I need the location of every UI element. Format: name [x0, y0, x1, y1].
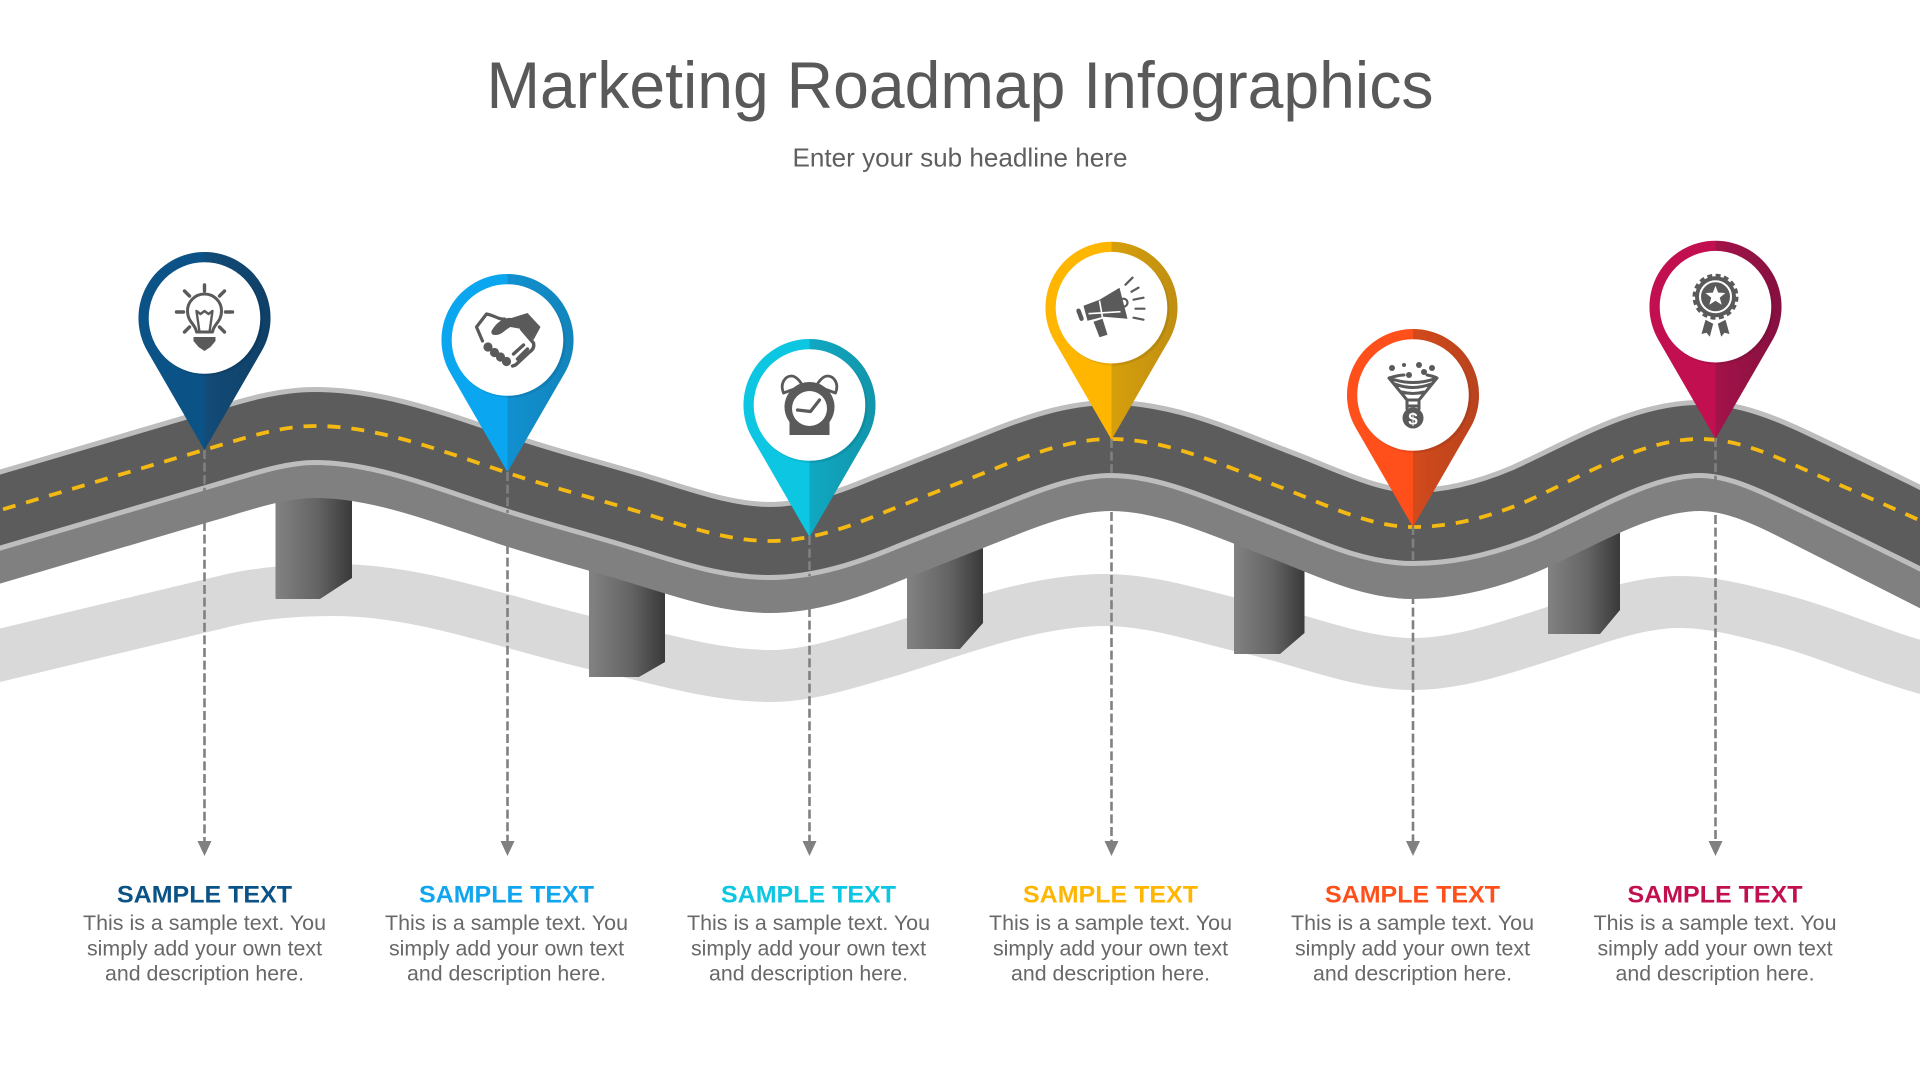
pillar 4	[1234, 540, 1304, 654]
road	[0, 426, 1920, 578]
pillar 2	[589, 550, 665, 677]
subtitle: Enter your sub headline here	[792, 142, 1128, 172]
pin 6: award	[1649, 241, 1782, 439]
text block 1: simply add your own text	[87, 936, 322, 960]
text block 6	[1594, 882, 1836, 986]
text block 6: This is a sample text. You	[1594, 911, 1836, 935]
text block 5: SAMPLE TEXT	[1325, 882, 1500, 908]
pin 4: megaphone	[1045, 242, 1178, 440]
text block 2: SAMPLE TEXT	[419, 882, 594, 908]
road ground shadow	[0, 590, 1920, 676]
road side face	[0, 462, 1920, 578]
text block 5	[1291, 882, 1534, 986]
text block 4: SAMPLE TEXT	[1023, 882, 1198, 908]
icon: award ribbon	[1694, 275, 1737, 337]
text block 4: This is a sample text. You	[989, 911, 1232, 935]
text block 4: simply add your own text	[993, 936, 1228, 960]
text block 5: This is a sample text. You	[1291, 911, 1534, 935]
road kerb	[0, 426, 1920, 541]
title: Marketing Roadmap Infographics	[486, 48, 1434, 122]
leader arrow 2	[500, 472, 514, 856]
text block 5: and description here.	[1313, 962, 1512, 986]
text block 2: This is a sample text. You	[385, 911, 628, 935]
icon: funnel: $	[1408, 410, 1418, 428]
leader arrow 5	[1406, 526, 1420, 856]
text block 6: SAMPLE TEXT	[1628, 882, 1803, 908]
bridge pillars	[276, 480, 1620, 677]
road surface	[0, 426, 1920, 541]
icon: alarm clock	[782, 376, 837, 435]
pin 5: sales funnel	[1347, 329, 1479, 527]
icon: funnel	[1389, 362, 1437, 428]
icon: megaphone	[1078, 278, 1144, 337]
text block 3: This is a sample text. You	[687, 911, 930, 935]
pin 3: alarm clock	[743, 339, 876, 537]
leader arrow 1	[198, 450, 212, 856]
text block 2	[385, 882, 628, 986]
text block 2: and description here.	[407, 962, 606, 986]
icon: handshake	[476, 313, 540, 366]
pin 2: handshake	[441, 274, 574, 472]
text block 5: simply add your own text	[1295, 936, 1530, 960]
text block 4: and description here.	[1011, 962, 1210, 986]
icon: light bulb	[176, 285, 232, 351]
text block 3	[687, 882, 930, 986]
leader arrow 3	[802, 536, 816, 856]
text block 1: and description here.	[105, 962, 304, 986]
text block 1: SAMPLE TEXT	[117, 882, 292, 908]
text block 6: and description here.	[1616, 962, 1814, 986]
text block 6: simply add your own text	[1598, 936, 1833, 960]
text block 4	[989, 882, 1232, 986]
pillar 3	[907, 530, 983, 649]
pin 1: idea	[138, 252, 271, 450]
text block 3: simply add your own text	[691, 936, 926, 960]
road centre line	[0, 426, 1920, 541]
text block 2: simply add your own text	[389, 936, 624, 960]
text block 3: and description here.	[709, 962, 908, 986]
text block 1: This is a sample text. You	[83, 911, 326, 935]
text block 3: SAMPLE TEXT	[721, 882, 896, 908]
pillar 1	[276, 480, 352, 599]
pillar 5	[1548, 515, 1620, 634]
leader arrow 6	[1708, 438, 1722, 856]
leader arrow 4	[1104, 439, 1118, 856]
text block 1	[83, 882, 326, 986]
